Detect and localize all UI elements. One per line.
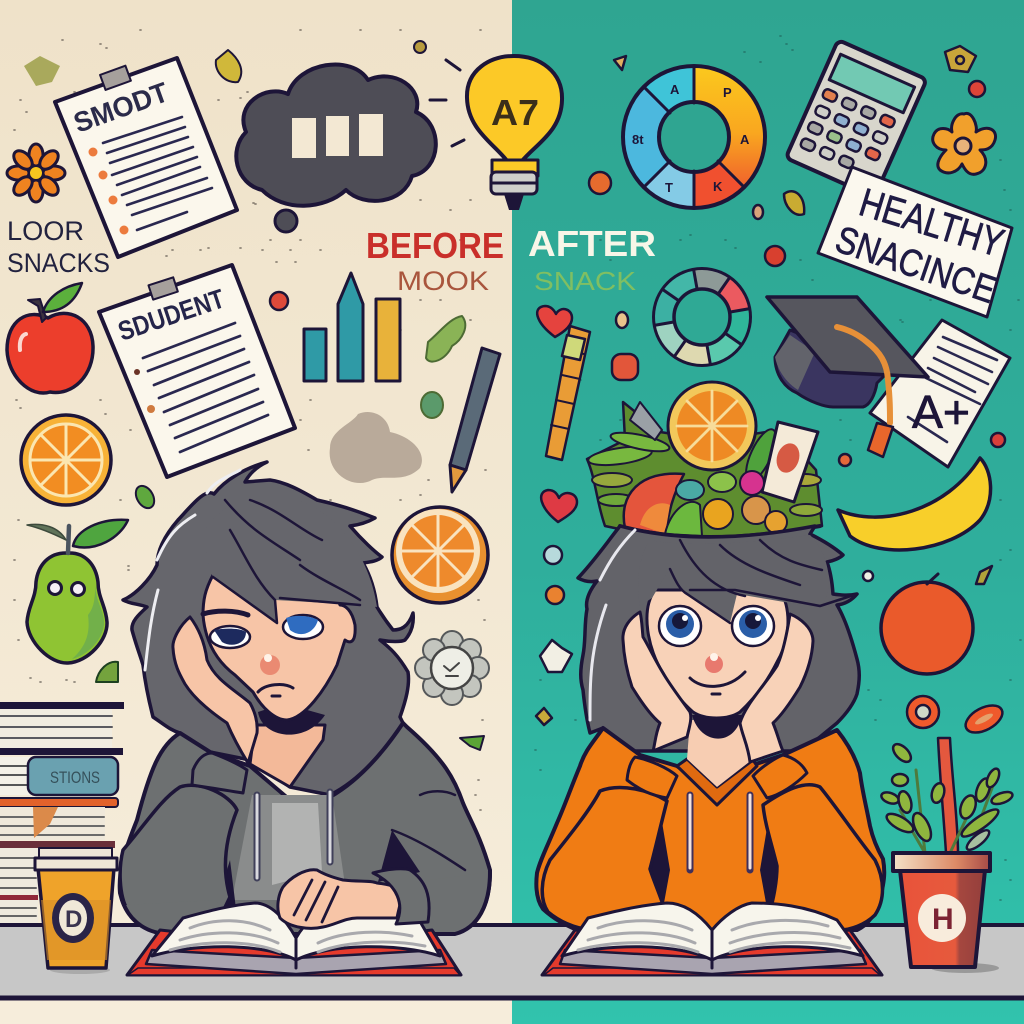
icon: gear badge [415,631,489,705]
chart: donut wheel: 8t [632,132,644,147]
hair lines [590,530,857,720]
icon: open book left [127,903,461,975]
icon: orange slice left [21,415,111,505]
title: after: AFTER [528,223,656,264]
icon: small dots left [24,41,426,310]
neck [250,725,325,787]
icon: flower right [933,113,996,174]
right sleeve lines [392,791,465,870]
hoodie outline left [122,872,490,934]
hood collar [677,759,757,805]
finger lines [294,880,338,922]
chart: donut wheel: K [713,179,723,194]
eyes [659,606,774,646]
hair lines [145,470,360,670]
chart: donut wheel: A [670,82,680,97]
note: A+ paper [870,320,1010,467]
note: A+ paper: A+ [912,386,970,438]
icon: leaf scraps [96,316,484,750]
right cuff [373,869,429,924]
icon: pear [27,520,128,663]
chin shadow [692,715,742,739]
hoodie center shadow gaps [635,810,795,925]
label: loor snacks: SNACKS [7,248,110,278]
left cuff [627,757,677,798]
panel: table [0,925,1024,998]
hair fringe [638,535,829,623]
nose and mouth [258,654,293,696]
right sleeve [763,785,882,930]
right hand [740,614,813,762]
background speckles before [14,30,486,810]
sign: healthy snacking: SNACINCE [830,219,1001,312]
left cuff [192,753,247,793]
icon: book stack: STIONS [50,768,100,787]
hoodie strings [257,792,330,878]
face [647,590,788,718]
chart: small donut [648,263,756,371]
sign: healthy snacking [818,167,1012,317]
icon: coffee cup [35,848,117,968]
icon: storm cloud [236,64,436,232]
note: student sheet [99,265,295,477]
hair back [123,462,413,795]
left sleeve [542,788,670,930]
title: before: BEFORE [366,225,504,266]
eyes [203,611,323,648]
hoodie shirt panel [272,803,322,885]
chart: donut wheel: T [665,180,673,195]
icon: orange fruit [881,574,973,674]
hoodie strings [690,795,750,870]
note: student sheet: SDUDENT [114,283,229,347]
label: loor snacks: LOOR [7,216,84,246]
hair fringe [205,496,377,623]
hoodie [536,728,884,930]
hair back [578,526,859,751]
icon: calculator [786,40,927,197]
left hand [623,612,691,751]
icon: potted plant: H [932,903,954,936]
icon: potted plant [880,738,1014,967]
title: after [528,223,656,296]
figure: happy student [536,526,884,930]
face [203,575,355,720]
note: before sheet [55,58,237,257]
nose and smile [690,653,745,694]
icon: dots and scraps top right [589,46,985,266]
background speckles after [535,36,1021,900]
hand on book [278,870,403,928]
hoodie [120,723,490,930]
icon: orange slice right of student [392,507,488,603]
figure: sad student [120,462,490,930]
panel: before background [0,0,512,1024]
icon: right snack rings [839,433,1007,738]
icon: salad on head [587,382,822,537]
icon: left-side snacks right panel [536,306,873,725]
neck [687,720,753,787]
icon: coffee cup: D [65,906,82,933]
chin shadow [258,708,325,735]
chart: donut wheel: P [723,85,732,100]
chart: donut wheel: A [740,132,750,147]
chart: donut wheel [621,64,767,210]
icon: graduation cap [767,297,928,457]
title: after: SNACK [534,266,637,296]
icon: stain blot [330,412,422,483]
hoodie strings highlight [257,792,330,878]
label: loor snacks [7,216,110,278]
icon: pencil [450,348,500,492]
icon: open book right [542,903,882,975]
bar chart [304,273,400,381]
icon: light bulb: A7 [491,92,539,133]
right cuff [753,755,807,798]
panel: after background [512,0,1024,1024]
title: before: MOOK [397,266,489,296]
icon: flower left [7,144,65,202]
icon: light bulb [430,56,562,210]
hoodie chest [232,795,345,900]
hoodie shadow gaps [210,830,420,925]
hoodie bottom over table left [125,872,490,934]
note: before sheet: SMODT [70,76,172,139]
icon: book stack [0,702,124,925]
icon: banana [838,458,991,550]
hand on cheek [173,617,257,763]
hoodie strings highlight [690,795,750,868]
title: before [366,225,504,296]
icon: apple [7,283,93,393]
left sleeve [120,785,237,928]
